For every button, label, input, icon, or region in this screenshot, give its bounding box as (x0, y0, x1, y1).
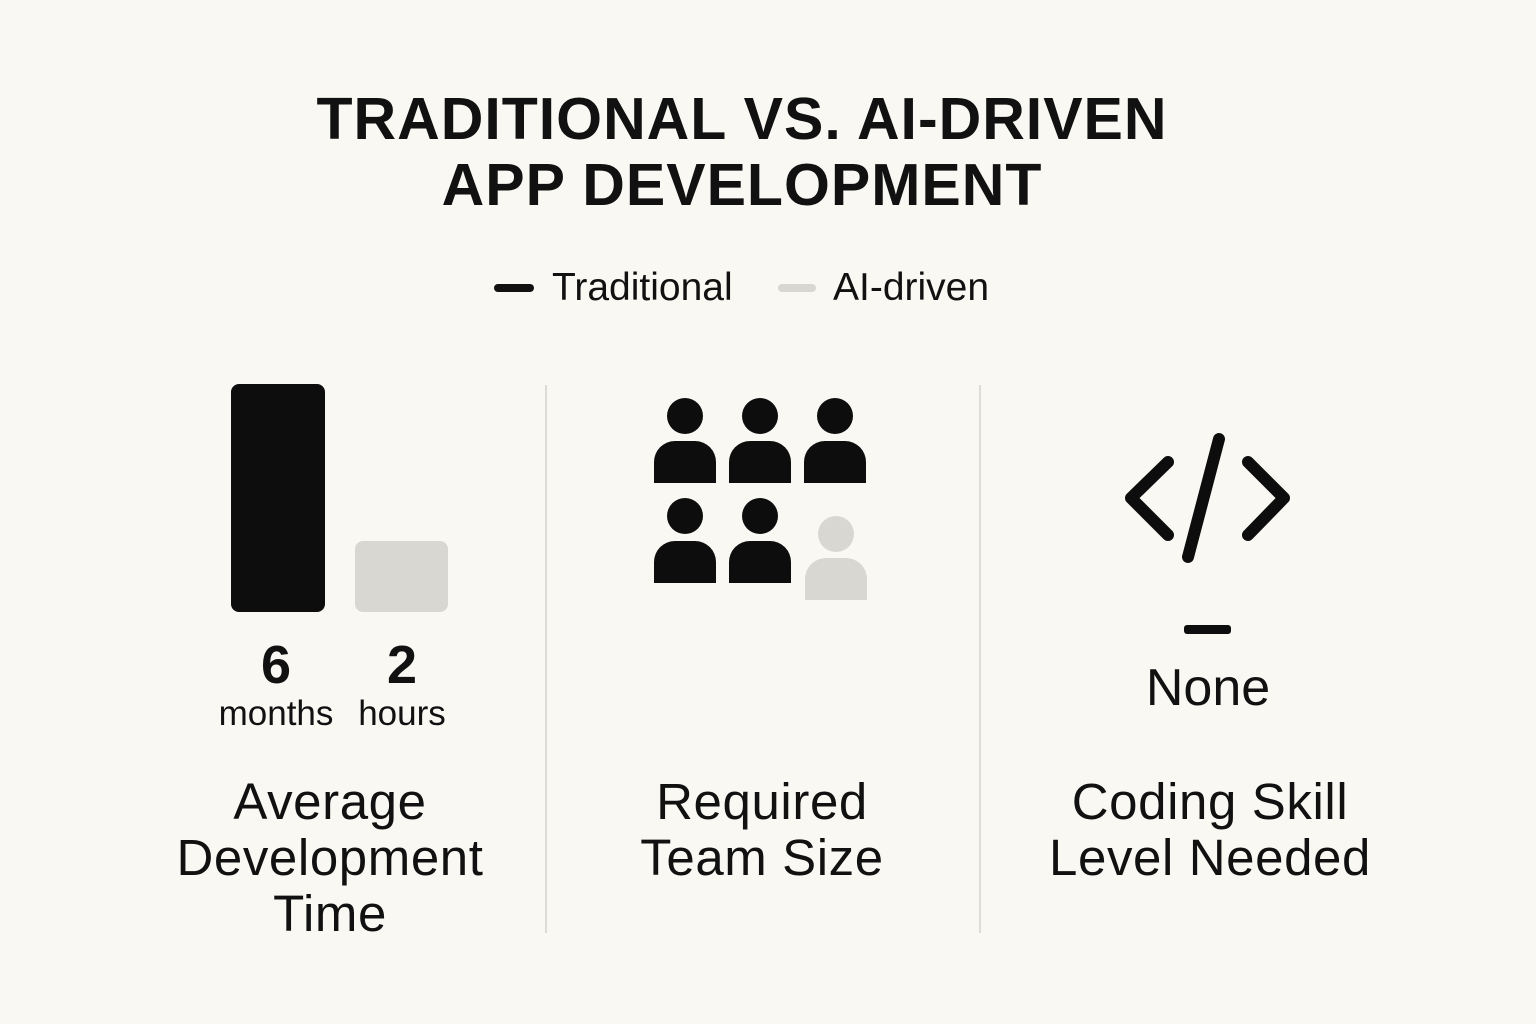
label (640, 773, 884, 886)
title (316, 86, 1168, 218)
value: None: None (1146, 659, 1270, 717)
value: 2 hours (358, 635, 446, 733)
label: Team Size (640, 829, 884, 886)
label: Time (273, 885, 387, 942)
legend item: traditional: Traditional (552, 266, 733, 309)
label: Coding Skill (1072, 773, 1348, 830)
label (176, 773, 484, 942)
label: Average (233, 773, 427, 830)
panel: coding skill (1049, 433, 1371, 886)
value: 2 hours: 2 (387, 635, 417, 695)
legend (494, 266, 989, 309)
label: Required (656, 773, 868, 830)
panel: team size (640, 398, 884, 886)
title: TRADITIONAL VS. AI-DRIVEN (316, 86, 1168, 152)
icon: team of people (654, 398, 867, 600)
label (1049, 773, 1371, 886)
bar: traditional 6 months (231, 384, 325, 612)
dash: AI-driven none (1184, 625, 1231, 634)
value: 6 months: months (219, 694, 333, 733)
title: APP DEVELOPMENT (442, 152, 1042, 218)
bar: AI 2 hours (355, 541, 448, 612)
label: Level Needed (1049, 829, 1371, 886)
label: Development (176, 829, 484, 886)
value: 6 months: 6 (261, 635, 291, 695)
icon: code brackets (1125, 433, 1290, 563)
value: 6 months (219, 635, 333, 733)
panel: development time (176, 384, 484, 942)
value: 2 hours: hours (358, 694, 446, 733)
legend item: AI-driven: AI-driven (833, 266, 989, 309)
